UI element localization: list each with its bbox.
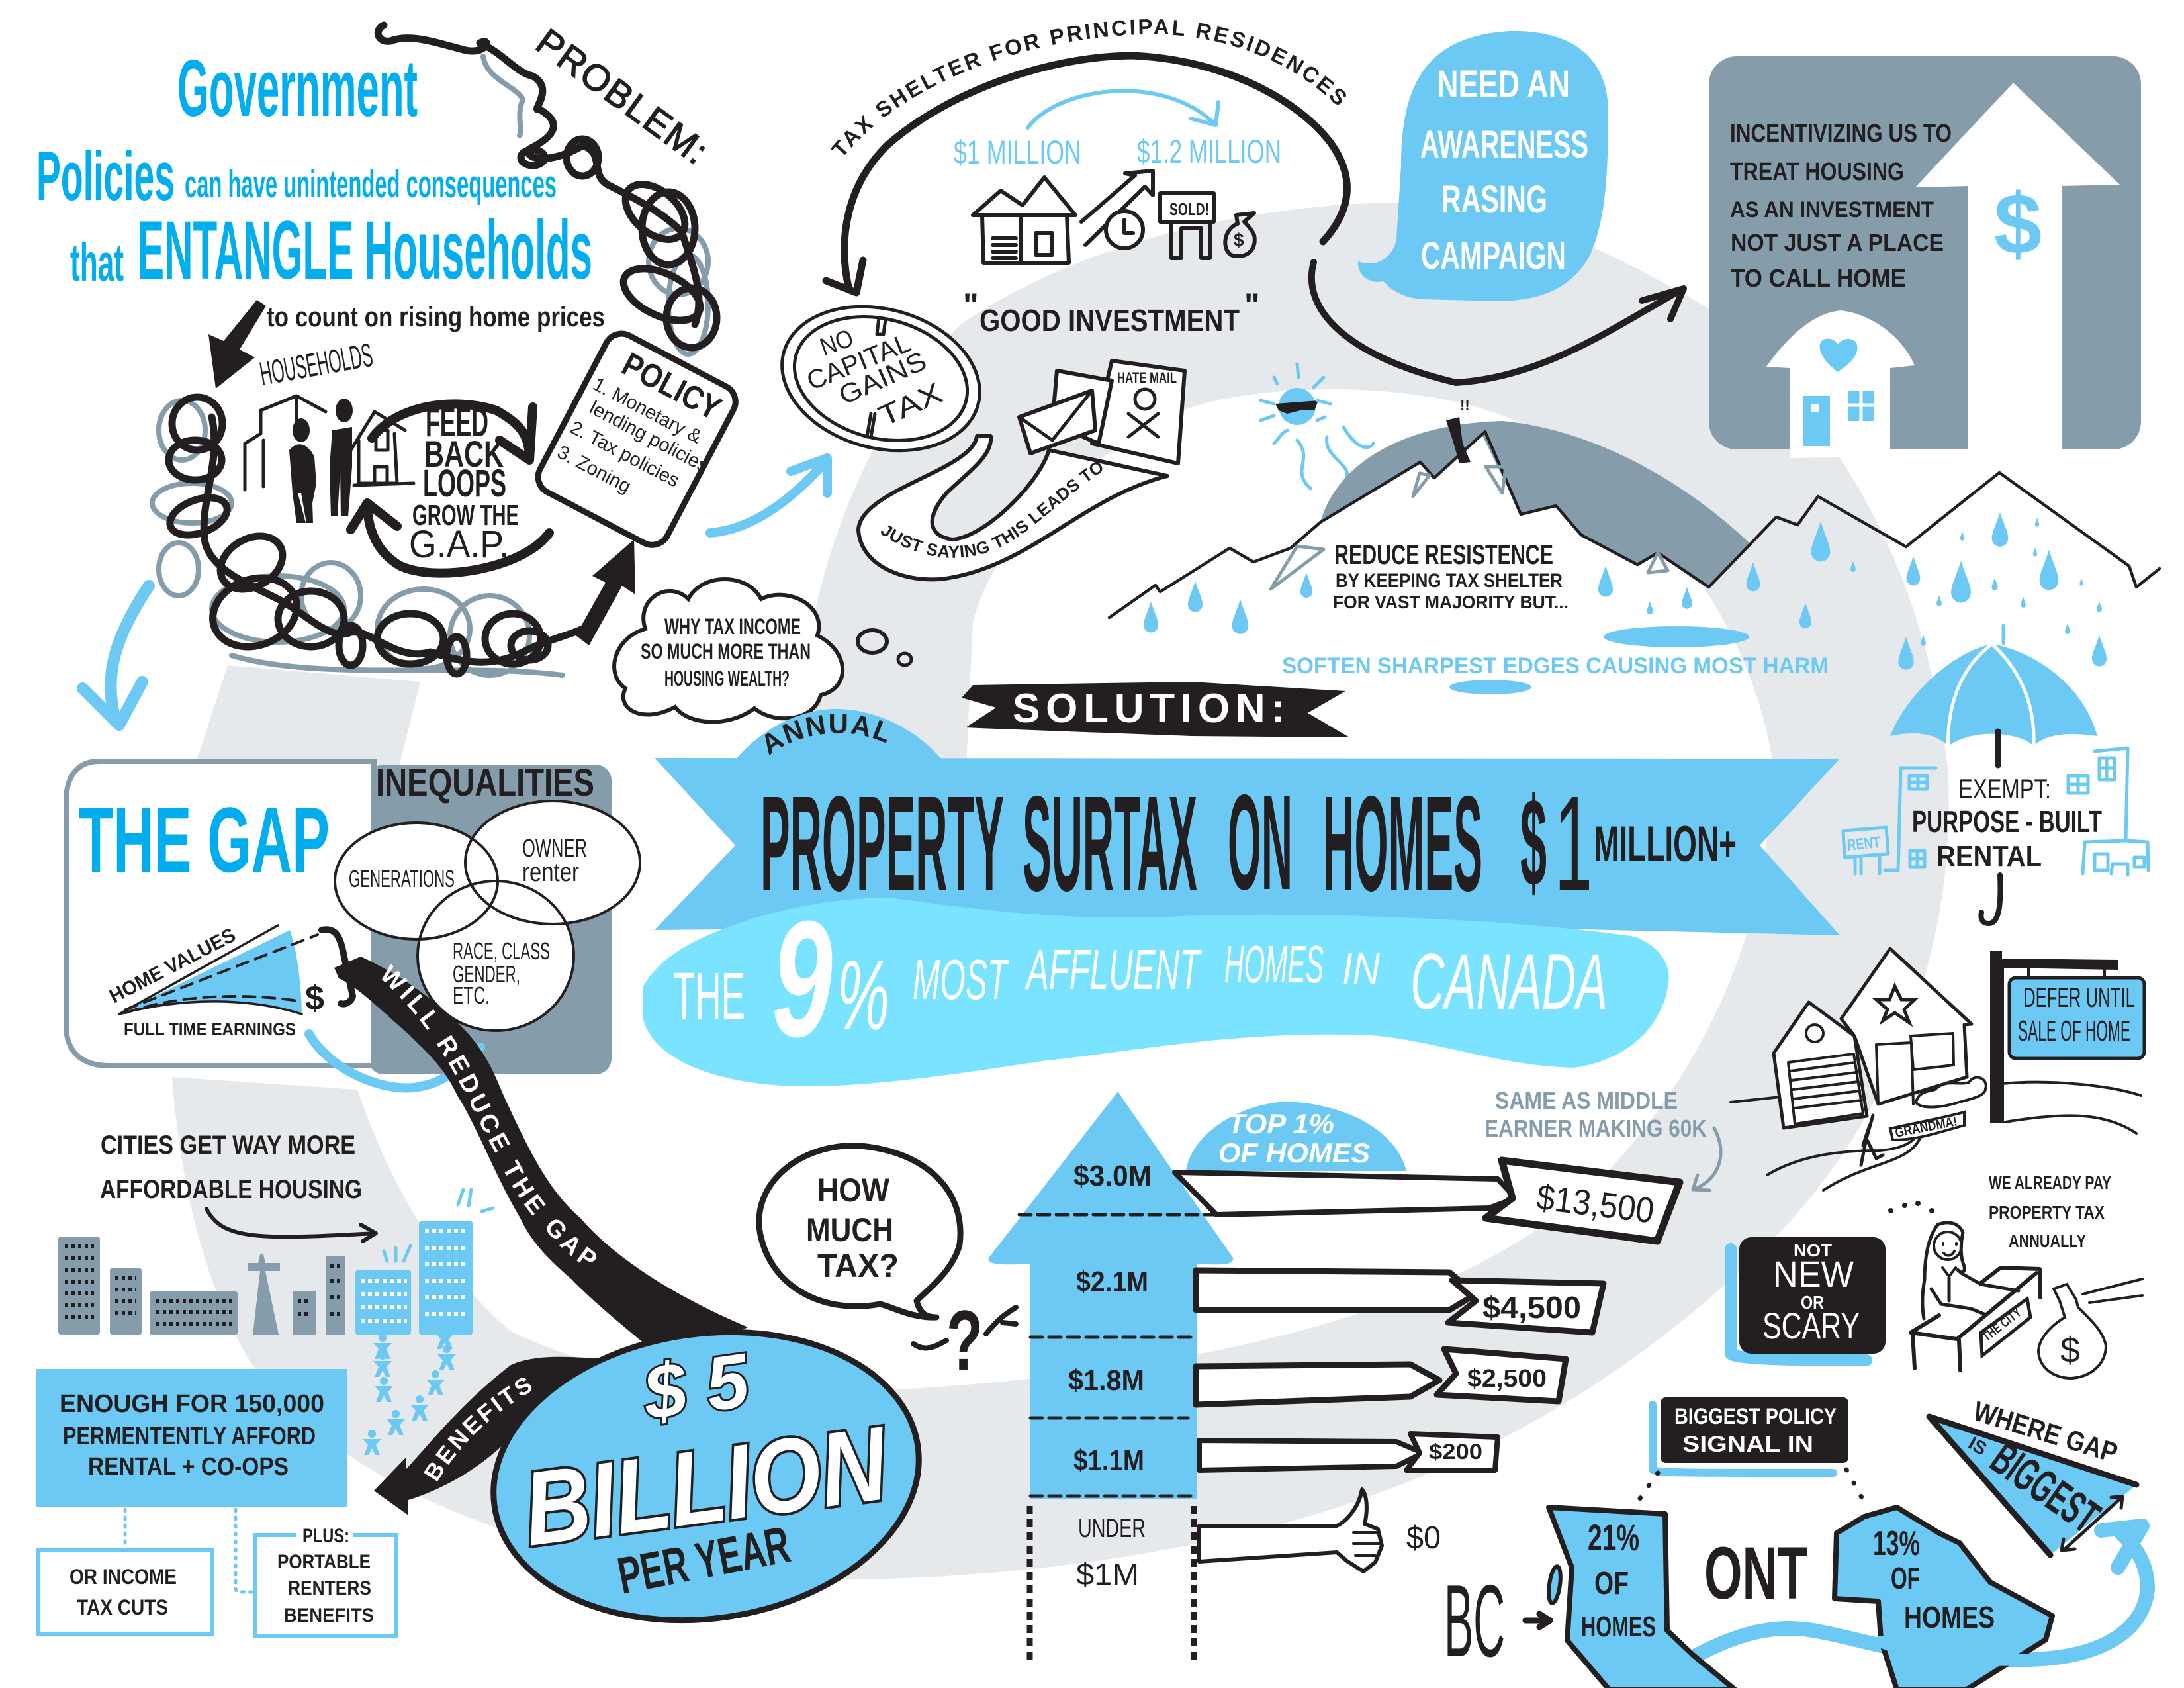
text: BC [1444, 1564, 1505, 1678]
panel text: AS AN INVESTMENT [1730, 197, 1934, 222]
box: portable renters benefits: BENEFITS [284, 1605, 374, 1626]
banner: annual cap [737, 709, 941, 759]
values: 1 million to 1.2 million: $1 MILLION [954, 134, 1081, 171]
icon: money bag: $ [1234, 230, 1244, 250]
chart: home values vs earnings [106, 924, 353, 1039]
band: 9 percent: IN [1342, 943, 1380, 994]
venn diagram: ETC. [453, 982, 490, 1009]
text: feedback loops grow the gap: FEED [426, 400, 488, 445]
icon: no capital gains manhole: CAPITAL [803, 328, 915, 396]
icon: house [973, 177, 1075, 263]
panel: enough for 150000: PERMENTENTLY AFFORD [63, 1423, 316, 1450]
panel text: INCENTIVIZING US TO [1730, 120, 1952, 148]
main ribbon: property surtax: SURTAX [1023, 768, 1197, 919]
panel: the gap [66, 761, 640, 1074]
bubble: 5 billion per year [475, 1305, 938, 1647]
icon: dollar: $ [1994, 175, 2042, 272]
callout: not new or scary: NEW [1773, 1253, 1854, 1295]
band: benefits arrow [374, 1357, 598, 1515]
gap heading: THE GAP [79, 788, 330, 892]
venn diagram: GENERATIONS [349, 865, 455, 892]
thought cloud: why tax income: SO MUCH MORE THAN [641, 639, 811, 663]
panel: enough for 150000 [36, 1369, 347, 1507]
text: to count on rising home prices: to count on rising home prices [267, 301, 605, 332]
text: reduce resistence [1333, 539, 1569, 612]
callout: biggest policy signal [1635, 1397, 1866, 1506]
text: reduce resistence: BY KEEPING TAX SHELTER [1336, 570, 1563, 592]
blue curve below gap [309, 1034, 480, 1088]
icon: hate mail envelopes [1019, 361, 1185, 463]
pennant: where gap is biggest [1929, 1395, 2136, 1555]
venn diagram: RACE, CLASS [453, 937, 550, 964]
scroll ribbon: just saying: JUST SAYING THIS LEADS TO [881, 462, 1103, 558]
main ribbon: property surtax: $ [1520, 773, 1547, 913]
title: government policies: can have unintended consequences [185, 163, 557, 206]
black entangled scribble [165, 25, 717, 674]
text: soften sharpest edges: SOFTEN SHARPEST EDGES CAUSING MOST HARM [1282, 653, 1829, 679]
dome: top 1 percent [1186, 1102, 1406, 1171]
pennant: where gap is biggest: BIGGEST [1981, 1432, 2109, 1543]
venn diagram: OWNER [522, 835, 587, 863]
main ribbon: property surtax: PROPERTY [760, 768, 1004, 919]
band: 9 percent [643, 886, 1669, 1086]
bar: 4,500: $4,500 [1482, 1290, 1581, 1325]
policy list: 3. Zoning [554, 442, 634, 498]
chart: home values vs earnings: FULL TIME EARNINGS [124, 1019, 296, 1039]
text: feedback loops grow the gap: GROW THE [412, 499, 519, 532]
arrow: blue to no capital gains [710, 458, 827, 533]
band: benefits arrow: BENEFITS [424, 1378, 532, 1481]
thought cloud: why tax income [614, 579, 911, 722]
note: same as middle earner: SAME AS MIDDLE [1495, 1087, 1678, 1114]
callout: not new or scary: SCARY [1762, 1305, 1860, 1346]
pennant: where gap is biggest: WHERE GAP [1970, 1395, 2121, 1468]
speech bubble: how much tax [759, 1146, 1016, 1389]
main ribbon: property surtax: HOMES [1323, 768, 1482, 919]
banner: solution: SOLUTION: [1013, 686, 1285, 731]
text: feedback loops grow the gap: G.A.P. [409, 523, 509, 566]
pennant: where gap is biggest: IS [1965, 1432, 1990, 1459]
speech bubble: how much tax: MUCH [806, 1211, 893, 1248]
panel text: TREAT HOUSING [1730, 158, 1904, 186]
bar: 2,500 [1196, 1349, 1566, 1405]
bar: zero thumbs up [1199, 1489, 1441, 1571]
box: portable renters benefits: PORTABLE [277, 1551, 371, 1573]
text: ENTANGLE Households [138, 205, 592, 297]
main ribbon: property surtax: 1 [1555, 768, 1592, 919]
panel text: TO CALL HOME [1731, 265, 1906, 293]
rain drops [1144, 512, 2107, 670]
band: 9 percent: HOMES [1224, 935, 1324, 994]
households heading: HOUSEHOLDS [257, 336, 375, 393]
text: we already pay: ANNUALLY [2009, 1231, 2086, 1251]
icon: no capital gains manhole: TAX [874, 377, 947, 433]
banner: solution [962, 682, 1349, 737]
icon: grandma houses: GRANDMA! [1894, 1114, 1958, 1141]
thought cloud: why tax income: HOUSING WEALTH? [664, 667, 790, 690]
text: exempt purpose built rental: PURPOSE - BUILT [1912, 804, 2102, 839]
panel text [1730, 120, 1952, 293]
bar: 2,500: $2,500 [1467, 1365, 1547, 1393]
icon: rising arrow and clock [1081, 171, 1153, 248]
map: BC [1547, 1507, 1735, 1688]
venn diagram [335, 801, 640, 1031]
band: 9 percent: 9 [772, 886, 833, 1071]
callout: biggest policy signal: BIGGEST POLICY [1674, 1404, 1837, 1429]
text: TAX SHELTER FOR PRINCIPAL RESIDENCES [830, 19, 1346, 155]
title: government policies [36, 43, 592, 297]
band: 9 percent: % [837, 939, 889, 1051]
feedback loop arrows [351, 404, 549, 573]
chart: tax arrow: $1.8M [1068, 1364, 1144, 1397]
mountains: !! [1460, 397, 1470, 414]
callout: not new or scary: NOT [1794, 1241, 1832, 1260]
slate scribble [152, 56, 708, 675]
band: 9 percent: AFFLUENT [1024, 939, 1202, 1002]
text: exempt purpose built rental: RENTAL [1936, 840, 2042, 872]
speech bubble: awareness campaign: NEED AN [1437, 63, 1570, 106]
band: will reduce the gap [334, 957, 748, 1342]
bar: zero thumbs up: $0 [1406, 1521, 1441, 1556]
chart: tax arrow: $3.0M [1073, 1160, 1152, 1192]
arrow: into households [208, 300, 266, 389]
tax shelter arc arrow [826, 56, 1347, 293]
panel: incentivizing [1709, 56, 2141, 458]
text: cities get more housing: AFFORDABLE HOUSING [100, 1175, 362, 1204]
band: 9 percent: THE [673, 959, 745, 1033]
bubble: 5 billion per year: $ 5 [638, 1338, 755, 1436]
blue swoosh arrow across map [1691, 1526, 2148, 1660]
icon: sold sign: SOLD! [1169, 199, 1209, 219]
band: will reduce the gap: WILL REDUCE THE GAP [382, 964, 597, 1263]
icon: no capital gains manhole: NO [817, 324, 857, 361]
title: government policies: Policies [36, 138, 175, 215]
icon: rental buildings: RENT [1846, 833, 1882, 855]
text: feedback loops grow the gap: LOOPS [423, 462, 506, 505]
chart: tax arrow: $1M [1076, 1557, 1139, 1591]
chart: tax arrow: $2.1M [1076, 1266, 1148, 1298]
map: BC: OF [1594, 1566, 1629, 1601]
dotted connectors [125, 1509, 253, 1592]
puddles [1449, 626, 1749, 694]
text: we already pay: PROPERTY TAX [1989, 1202, 2105, 1223]
panel: enough for 150000: RENTAL + CO-OPS [88, 1453, 289, 1481]
title: government policies: that [70, 233, 124, 292]
chart: tax arrow: UNDER [1078, 1514, 1146, 1543]
text: cities get more housing [100, 1131, 362, 1204]
chart: home values vs earnings: HOME VALUES [106, 924, 240, 1008]
bar: 200: $200 [1429, 1440, 1482, 1464]
box: portable renters benefits [255, 1525, 396, 1636]
text: we already pay: WE ALREADY PAY [1989, 1172, 2111, 1193]
panel: enough for 150000: ENOUGH FOR 150,000 [60, 1390, 324, 1418]
values: 1 million to 1.2 million [954, 133, 1281, 171]
text: exempt purpose built rental [1912, 773, 2102, 872]
swoosh over Ontario [1881, 1642, 2027, 1660]
dome: top 1 percent: TOP 1% [1228, 1108, 1334, 1139]
quote: good investment: " [1244, 287, 1260, 324]
title: government policies: Government [177, 43, 418, 133]
box: or income tax cuts: TAX CUTS [77, 1595, 168, 1619]
panel text: NOT JUST A PLACE [1731, 229, 1944, 256]
band: 9 percent: MOST [913, 949, 1009, 1011]
speech bubble: awareness campaign: RASING [1441, 178, 1547, 221]
blue value arrow [1028, 91, 1218, 128]
policy list [554, 373, 723, 525]
arrow: to incentives panel [1312, 262, 1684, 383]
icon: investment arrow [1915, 83, 2120, 449]
speech bubble: how much tax: HOW [817, 1172, 890, 1209]
policy heading: POLICY [616, 346, 727, 428]
mountains [1109, 397, 2160, 618]
speech bubble: awareness campaign: CAMPAIGN [1421, 234, 1566, 277]
icon: no capital gains manhole [766, 285, 996, 472]
text: cities get more housing: CITIES GET WAY MORE [101, 1131, 355, 1160]
panel: policy card [532, 328, 745, 553]
bubble: 5 billion per year: PER YEAR [613, 1515, 794, 1605]
icon: sold sign [1160, 193, 1214, 258]
icon: rental buildings [1843, 748, 2148, 875]
note: same as middle earner: EARNER MAKING 60K [1484, 1115, 1707, 1142]
quote: good investment: " [963, 287, 979, 324]
speech bubble: awareness campaign: AWARENESS [1420, 123, 1588, 166]
callout: not new or scary: OR [1801, 1292, 1824, 1313]
label: ONT: ONT [1704, 1532, 1807, 1615]
inequalities heading: INEQUALITIES [376, 761, 594, 804]
box: portable renters benefits: RENTERS [288, 1577, 371, 1599]
venn diagram: renter [522, 858, 579, 887]
background spiral band [172, 203, 1949, 1580]
curved heading: tax shelter [842, 34, 1363, 159]
policy list: 1. Monetary & [589, 373, 705, 448]
skyline [58, 1190, 493, 1335]
people walking to housing [363, 1324, 456, 1455]
callout: not new or scary [1731, 1237, 1886, 1360]
icon: clerk at the city desk [1888, 1201, 2142, 1378]
text: exempt purpose built rental: EXEMPT: [1958, 773, 2051, 804]
callout: biggest policy signal: SIGNAL IN [1682, 1432, 1813, 1457]
arrow: BC to map [1525, 1614, 1550, 1627]
box: portable renters benefits: PLUS: [302, 1525, 349, 1547]
speech bubble: how much tax: TAX? [817, 1247, 899, 1284]
map: BC: 21% [1588, 1517, 1639, 1558]
note: same as middle earner [1484, 1087, 1721, 1190]
icon: umbrella [1890, 626, 2097, 923]
text: reduce resistence: FOR VAST MAJORITY BUT... [1333, 592, 1569, 612]
arrow: to affordable housing [206, 1209, 376, 1241]
bar: 13,500 [1175, 1160, 1680, 1241]
speech bubble: awareness campaign [1358, 31, 1608, 301]
icon: grandma houses [1731, 949, 2141, 1190]
map: Ontario [1835, 1507, 2052, 1688]
main ribbon: property surtax [655, 758, 1840, 935]
arrow: blue down to the gap [83, 586, 149, 725]
map: Ontario: HOMES [1904, 1600, 1995, 1634]
icon: sun with sunglasses [1261, 364, 1373, 489]
chart: tax arrow [989, 1092, 1233, 1663]
icon: home with heart [1766, 310, 1915, 458]
text: feedback loops grow the gap: BACK [424, 433, 504, 475]
sign: defer until sale [1990, 951, 2144, 1123]
thought cloud: why tax income: WHY TAX INCOME [664, 614, 801, 639]
bar: 4,500 [1196, 1270, 1604, 1333]
main ribbon: property surtax: ON [1228, 767, 1293, 918]
quote: good investment: GOOD INVESTMENT [979, 303, 1240, 338]
icon: question mark: ? [946, 1292, 983, 1389]
icon: households people and homes [245, 396, 414, 523]
band: 9 percent: CANADA [1410, 937, 1608, 1026]
icon: no capital gains manhole: GAINS [835, 346, 931, 410]
box: or income tax cuts: OR INCOME [69, 1565, 177, 1589]
map: BC: HOMES [1581, 1611, 1656, 1643]
chart: home values vs earnings: $ [305, 979, 324, 1017]
icon: clerk at the city desk: THE CITY [1980, 1305, 2025, 1344]
icon: clerk at the city desk: $ [2060, 1331, 2080, 1370]
icon: money bag [1225, 213, 1255, 256]
policy list: 2. Tax policies [567, 417, 683, 492]
text: we already pay [1989, 1172, 2111, 1251]
bar: 13,500: $13,500 [1535, 1177, 1657, 1231]
venn diagram: GENDER, [453, 961, 520, 988]
bubble: 5 billion per year: BILLION [517, 1405, 895, 1568]
text: feedback loops grow the gap [409, 400, 519, 566]
text: reduce resistence: REDUCE RESISTENCE [1334, 539, 1553, 570]
problem label: PROBLEM: [529, 21, 717, 173]
map: Ontario: OF [1891, 1561, 1920, 1595]
banner: annual cap: ANNUAL [765, 714, 887, 755]
values: 1 million to 1.2 million: $1.2 MILLION [1137, 133, 1281, 170]
dome: top 1 percent: OF HOMES [1218, 1137, 1370, 1168]
map: Ontario: 13% [1873, 1524, 1920, 1563]
policy list: lending policies [586, 397, 712, 477]
arrow: up to policy [576, 539, 635, 645]
icon: hate mail envelopes: HATE MAIL [1117, 369, 1177, 386]
box: or income tax cuts [38, 1550, 212, 1634]
scroll ribbon: just saying [856, 434, 1169, 581]
chart: tax arrow: $1.1M [1073, 1444, 1144, 1477]
main ribbon: property surtax: MILLION+ [1594, 816, 1737, 872]
bar: 200 [1199, 1434, 1498, 1470]
